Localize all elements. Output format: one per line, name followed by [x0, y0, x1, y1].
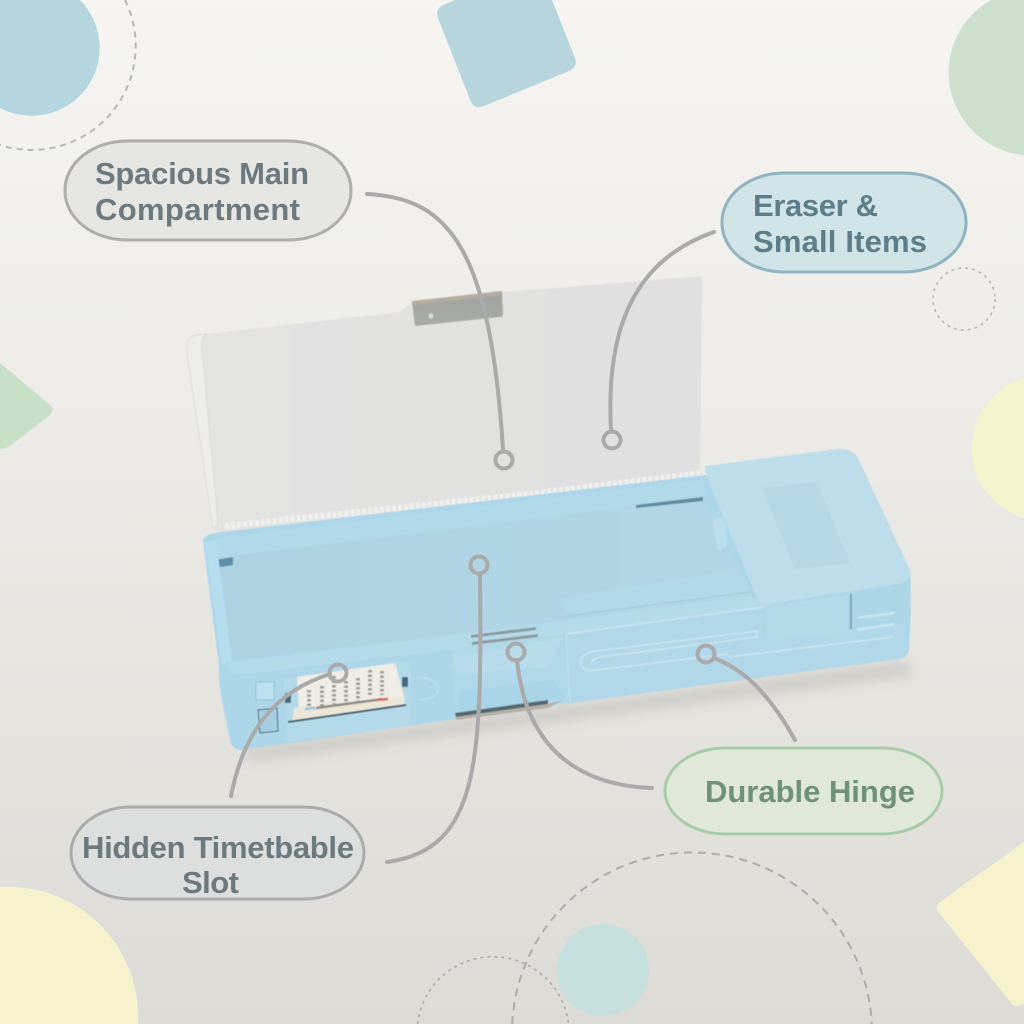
callout: Eraser & Small Items — [722, 173, 966, 272]
tray floor — [216, 498, 752, 660]
long front panel — [566, 606, 908, 703]
front ledge — [228, 596, 764, 675]
transparent lid — [187, 276, 702, 532]
callout: Spacious Main Compartment: Compartment — [95, 192, 300, 227]
case body — [203, 475, 911, 750]
timetable slot — [256, 660, 438, 742]
callout: Eraser & Small Items: Small Items — [753, 224, 927, 259]
metal clip — [412, 291, 503, 326]
callout: Hidden Timetbable Slot: Hidden Timetbable — [82, 830, 354, 865]
leader: eraser — [604, 232, 714, 448]
leader: durable — [698, 646, 795, 740]
callout: Durable Hinge — [665, 748, 942, 834]
back wall — [208, 479, 706, 558]
callout: Eraser & Small Items: Eraser & — [753, 188, 878, 223]
leader: timetable — [231, 664, 346, 796]
pencil case — [187, 276, 915, 762]
callout: Hidden Timetbable Slot: Slot — [182, 865, 239, 900]
hinge section — [450, 633, 570, 719]
leader: tray — [387, 556, 488, 862]
callout: Durable Hinge: Durable Hinge — [705, 774, 915, 809]
leader: hinge — [508, 644, 652, 788]
hinge metal — [471, 627, 538, 645]
right sliding box — [705, 449, 910, 642]
left wall — [205, 540, 232, 666]
lift up tab — [562, 571, 747, 615]
callout: Hidden Timetbable Slot — [71, 807, 364, 900]
callout: Spacious Main Compartment: Spacious Main — [95, 156, 309, 191]
callout leaders — [231, 194, 795, 862]
callout: Spacious Main Compartment — [65, 141, 351, 240]
shadow — [240, 660, 915, 762]
leader: main compartment — [367, 194, 512, 468]
